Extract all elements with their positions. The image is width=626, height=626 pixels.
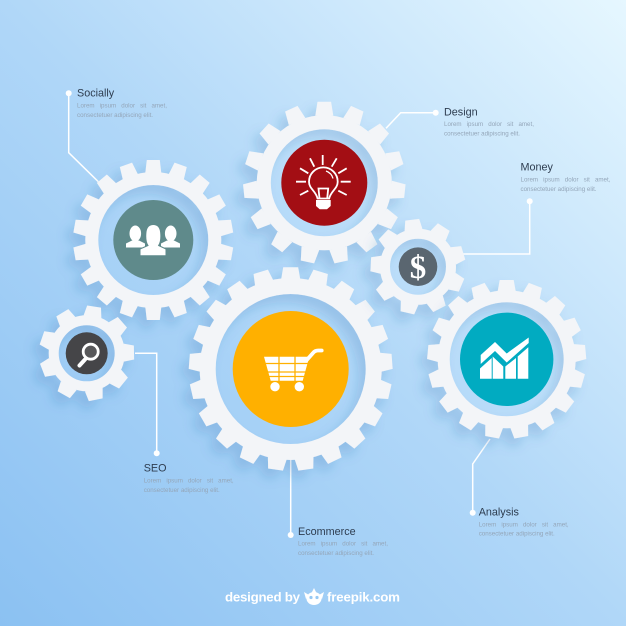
- icon: shopping cart: [264, 350, 322, 391]
- gear: SEO: [39, 305, 134, 401]
- text block: Analysis: [479, 507, 569, 538]
- icon disc: [66, 332, 108, 374]
- footer credit: freepik.com: [327, 590, 400, 604]
- text block: Socially: Socially: [77, 88, 115, 100]
- connector: Design: [386, 110, 439, 128]
- icon: light bulb: [296, 155, 351, 209]
- text block: Design: consectetuer adipiscing elit.: [444, 130, 520, 138]
- gear body: [189, 267, 393, 471]
- footer credit: [225, 588, 400, 605]
- text block: SEO: consectetuer adipiscing elit.: [144, 487, 220, 494]
- icon: dollar sign: $: [410, 250, 426, 286]
- gear body: [73, 160, 233, 320]
- text block: Design: Design: [444, 107, 478, 119]
- icon: magnifier: [80, 344, 98, 366]
- gear body: [39, 305, 134, 401]
- icon: people: [126, 224, 180, 256]
- connector: Ecommerce: [288, 460, 294, 538]
- text block: Design: [444, 107, 534, 138]
- icon disc: [233, 311, 349, 427]
- text block: Design: Lorem ipsum dolor sit amet,: [444, 121, 534, 128]
- text block: Ecommerce: Lorem ipsum dolor sit amet,: [298, 541, 388, 548]
- text block: Ecommerce: Ecommerce: [298, 526, 356, 538]
- text block: Analysis: consectetuer adipiscing elit.: [479, 531, 555, 538]
- icon disc: [113, 200, 193, 280]
- text block: Analysis: Lorem ipsum dolor sit amet,: [479, 521, 569, 528]
- icon disc: [399, 247, 437, 286]
- gear: Socially: [73, 160, 233, 320]
- connector: Money: [463, 198, 533, 254]
- text block: SEO: [144, 463, 234, 494]
- text block: Ecommerce: [298, 526, 388, 557]
- connector: Analysis: [470, 439, 490, 516]
- gear: Design: [243, 102, 406, 264]
- connector: Socially: [66, 90, 98, 182]
- text block: SEO: Lorem ipsum dolor sit amet,: [144, 477, 234, 484]
- connector: SEO: [135, 353, 160, 456]
- text block: Money: consectetuer adipiscing elit.: [520, 186, 597, 193]
- text block: SEO: SEO: [144, 463, 167, 475]
- text block: Money: [520, 162, 611, 193]
- icon: freepik logo: [304, 588, 324, 605]
- text block: Socially: consectetuer adipiscing elit.: [77, 112, 153, 119]
- footer credit: designed by: [225, 590, 301, 604]
- gear body: [243, 102, 406, 264]
- text block: Ecommerce: consectetuer adipiscing elit.: [298, 550, 374, 557]
- text block: Money: Money: [520, 162, 554, 174]
- gear: Money: [370, 219, 466, 315]
- text block: Socially: [77, 88, 167, 119]
- text block: Analysis: Analysis: [479, 507, 520, 519]
- icon disc: [460, 313, 553, 406]
- icon: rising chart: [480, 338, 529, 379]
- gear: Ecommerce: [189, 267, 393, 471]
- text block: Socially: Lorem ipsum dolor sit amet,: [77, 102, 167, 110]
- icon disc: [281, 140, 367, 226]
- gear body: [370, 219, 466, 315]
- gear body: [427, 280, 586, 439]
- gear: Analysis: [427, 280, 586, 439]
- text block: Money: Lorem ipsum dolor sit amet,: [520, 176, 611, 183]
